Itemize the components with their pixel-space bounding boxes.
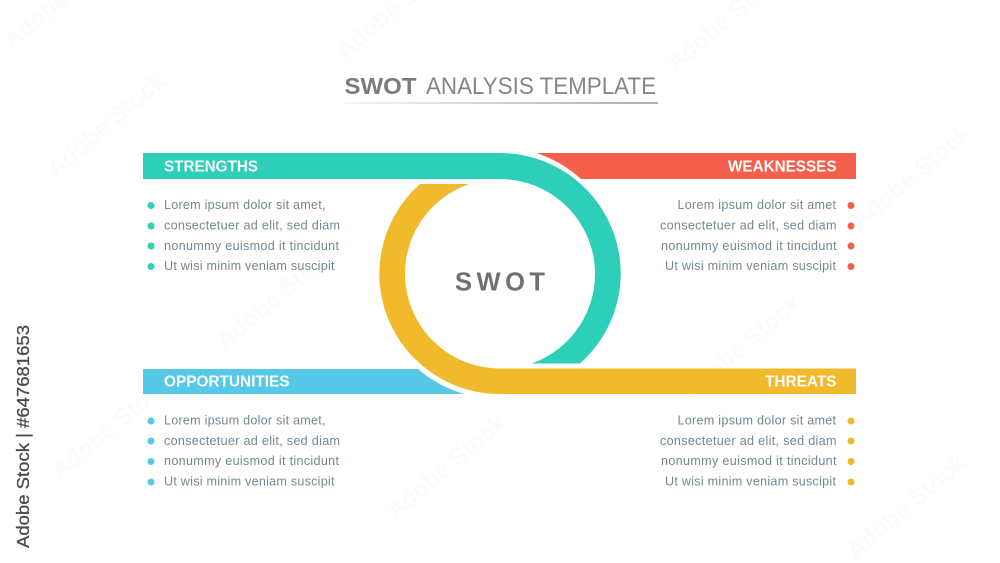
heading: strengths: STRENGTHS — [164, 158, 258, 176]
heading: opportunities: OPPORTUNITIES — [164, 374, 290, 390]
threats ribbon — [379, 184, 856, 394]
strengths ribbon — [143, 153, 621, 364]
stock credit: Adobe Stock | #647681653 — [13, 325, 33, 548]
text: Adobe Stock — [47, 369, 177, 485]
text: Adobe Stock — [677, 289, 807, 405]
heading: weaknesses: WEAKNESSES — [728, 158, 836, 176]
center label: SWOT — [455, 268, 545, 296]
list: weaknesses: Lorem ipsum dolor sit amet — [678, 198, 836, 212]
text: Adobe Stock — [847, 119, 977, 235]
text: Adobe Stock — [42, 67, 172, 183]
list: opportunities — [148, 414, 340, 488]
text: Adobe Stock — [842, 449, 972, 563]
list: threats: nonummy euismod it tincidunt — [661, 454, 837, 468]
list: opportunities: nonummy euismod it tincidunt — [164, 454, 340, 468]
list: strengths: nonummy euismod it tincidunt — [164, 239, 340, 253]
panel: opportunities header bar — [143, 369, 464, 394]
list: opportunities: Ut wisi minim veniam suscipit — [164, 474, 335, 488]
list: weaknesses — [660, 198, 854, 273]
title: SWOT — [344, 73, 417, 99]
list: threats: Ut wisi minim veniam suscipit — [665, 474, 836, 488]
list: strengths: Ut wisi minim veniam suscipit — [164, 259, 335, 273]
list: opportunities: consectetuer ad elit, sed diam — [164, 434, 340, 448]
text: Adobe Stock — [382, 409, 512, 525]
list: weaknesses: consectetuer ad elit, sed diam — [660, 218, 836, 232]
list: weaknesses: Ut wisi minim veniam suscipit — [665, 259, 836, 273]
list: threats: Lorem ipsum dolor sit amet — [678, 414, 836, 428]
list: strengths — [148, 198, 340, 273]
panel: weaknesses header bar — [536, 153, 856, 179]
heading: threats: THREATS — [765, 374, 836, 390]
list: strengths: Lorem ipsum dolor sit amet, — [164, 198, 326, 212]
title: ANALYSIS TEMPLATE — [426, 73, 656, 100]
list: opportunities: Lorem ipsum dolor sit amet, — [164, 414, 326, 428]
text: Adobe Stock — [212, 239, 342, 355]
list: threats — [660, 414, 854, 488]
list: strengths: consectetuer ad elit, sed diam — [164, 218, 340, 232]
list: threats: consectetuer ad elit, sed diam — [660, 434, 836, 448]
list: weaknesses: nonummy euismod it tincidunt — [661, 239, 837, 253]
